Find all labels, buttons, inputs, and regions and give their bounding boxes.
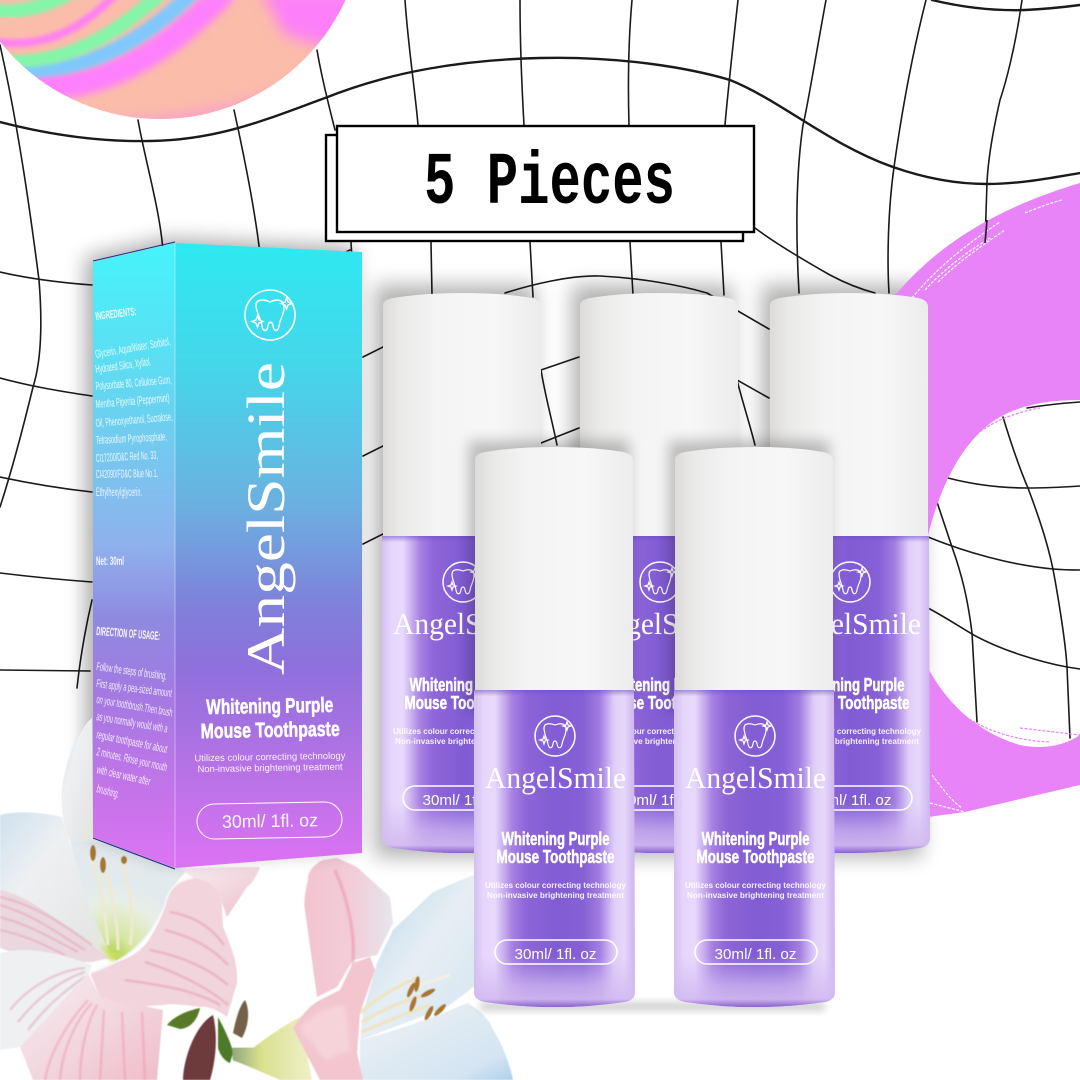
box usage text: Follow the steps of brushing. bbox=[96, 661, 168, 683]
tube label: Mouse Toothpaste bbox=[404, 693, 522, 713]
tube body bbox=[674, 690, 835, 1007]
box usage text: brushing. bbox=[95, 783, 121, 801]
box description: Non-invasive brightening treatment bbox=[198, 762, 343, 775]
box ingredients text: CI42090/FD&C Blue No.1, bbox=[96, 468, 158, 481]
box ingredients text: Ethylhexylglycerin. bbox=[96, 487, 142, 499]
tube label: AngelSmile bbox=[485, 760, 626, 795]
tube label bbox=[393, 562, 534, 810]
tube label: Non-invasive brightening treatment bbox=[687, 890, 824, 900]
tube label: Whitening Purple bbox=[796, 675, 904, 695]
tube label: Mouse Toothpaste bbox=[696, 847, 814, 867]
tube label bbox=[685, 716, 826, 964]
tube label: Utilizes colour correcting technology bbox=[393, 726, 534, 736]
box usage text bbox=[95, 624, 173, 801]
holographic gradient circle bbox=[0, 0, 346, 119]
box ingredients text: Net: 30ml bbox=[96, 554, 124, 568]
box usage text: with clear water after bbox=[95, 764, 152, 788]
tube body bbox=[382, 536, 543, 853]
tube body bbox=[474, 690, 635, 1007]
tube body bbox=[579, 536, 740, 853]
tube label: Mouse Toothpaste bbox=[496, 847, 614, 867]
tube label: Utilizes colour correcting technology bbox=[780, 726, 921, 736]
tube label: Utilizes colour correcting technology bbox=[685, 880, 826, 890]
box ingredients text bbox=[94, 306, 173, 568]
back tube 3 bbox=[769, 293, 930, 853]
tube label: 30ml/ 1fl. oz bbox=[422, 792, 505, 809]
grid segment over pink stroke bbox=[985, 220, 987, 243]
front tube 1 bbox=[474, 447, 635, 1007]
box description: Utilizes colour correcting technology bbox=[194, 751, 346, 764]
tube label bbox=[780, 562, 921, 810]
box usage text: DIRECTION OF USAGE: bbox=[96, 624, 161, 643]
tube label: Non-invasive brightening treatment bbox=[592, 736, 729, 746]
front tube 2 bbox=[674, 447, 835, 1007]
tube label: Non-invasive brightening treatment bbox=[487, 890, 624, 900]
box right face bbox=[175, 243, 362, 868]
tube label: Utilizes colour correcting technology bbox=[485, 880, 626, 890]
product box: First apply a pea-sized amount bbox=[96, 678, 173, 700]
box ingredients text: CI17200/D&C Red No. 33, bbox=[96, 450, 158, 465]
box product title: Mouse Toothpaste bbox=[200, 718, 340, 743]
tube label: Whitening Purple bbox=[606, 675, 714, 695]
tube label: Mouse Toothpaste bbox=[792, 693, 910, 713]
box usage text: 2 minutes. Rinse your mouth bbox=[95, 746, 168, 774]
tube label: 30ml/ 1fl. oz bbox=[514, 946, 597, 963]
tube label: Mouse Toothpaste bbox=[602, 693, 720, 713]
wavy grid background bbox=[0, 0, 1080, 738]
title badge bbox=[326, 126, 754, 241]
tube cap bbox=[580, 293, 738, 539]
box ingredients text: Hydrated Silica, Xylitol. bbox=[95, 356, 152, 376]
product box: Oil, Phenoxyethanol, Sucralose, bbox=[95, 411, 173, 430]
box usage text: as you normally would with a bbox=[95, 711, 169, 736]
box logo icon bbox=[245, 290, 295, 340]
tube label bbox=[590, 562, 731, 810]
tube label: Non-invasive brightening treatment bbox=[395, 736, 532, 746]
tube label bbox=[485, 716, 626, 964]
tube label: 30ml/ 1fl. oz bbox=[810, 792, 892, 809]
box size pill: 30ml/ 1fl. oz bbox=[222, 810, 318, 832]
box product title bbox=[200, 694, 340, 743]
product box: Polysorbate 80, Cellulose Gum, bbox=[95, 374, 172, 393]
box usage text: regular toothpaste for about bbox=[95, 729, 169, 756]
tube body bbox=[769, 536, 930, 853]
tube cap bbox=[475, 447, 633, 693]
box product title: Whitening Purple bbox=[206, 694, 333, 719]
box left face bbox=[93, 243, 175, 868]
tube label: 30ml/ 1fl. oz bbox=[714, 946, 797, 963]
flower petal over box shadow bbox=[62, 718, 93, 840]
tube label: Whitening Purple bbox=[502, 829, 610, 849]
tube label: Whitening Purple bbox=[702, 829, 810, 849]
tube label: AngelSmile bbox=[393, 606, 534, 641]
tube label: Whitening Purple bbox=[410, 675, 518, 695]
tube label: AngelSmile bbox=[780, 606, 921, 641]
back tube 1 bbox=[382, 293, 543, 853]
title text: 5 Pieces bbox=[424, 142, 675, 226]
tube label: Non-invasive brightening treatment bbox=[782, 736, 919, 746]
pink paint brush stroke bbox=[880, 183, 1080, 817]
box shadow bbox=[85, 238, 355, 860]
product box bbox=[93, 242, 362, 869]
product box: on your toothbrush.Then brush bbox=[95, 694, 173, 719]
tube label: 30ml/ 1fl. oz bbox=[620, 792, 702, 809]
front tube shadows bbox=[469, 441, 829, 711]
box description bbox=[194, 751, 346, 775]
front tube base shadow bbox=[480, 1002, 825, 1011]
box ingredients text: INGREDIENTS: bbox=[95, 306, 137, 323]
tube label: AngelSmile bbox=[590, 606, 731, 641]
box brand name: AngelSmile bbox=[236, 362, 296, 675]
flower right bbox=[233, 858, 513, 1080]
tube label: Utilizes colour correcting technology bbox=[590, 726, 731, 736]
tube cap bbox=[383, 293, 541, 539]
box ingredients text: Glycerin, Aqua/Water, Sorbitol, bbox=[94, 336, 171, 361]
tube cap bbox=[770, 293, 928, 539]
tube shadows bbox=[375, 285, 922, 857]
box ingredients text: Tetrasodium Pyrophosphate, bbox=[96, 431, 167, 447]
tube label: AngelSmile bbox=[685, 760, 826, 795]
box ingredients text: Mentha Piperita (Peppermint) bbox=[95, 393, 170, 411]
tube cap bbox=[675, 447, 833, 693]
back tube 2 bbox=[579, 293, 740, 853]
box size pill bbox=[197, 802, 342, 839]
flower left bbox=[0, 718, 267, 1080]
